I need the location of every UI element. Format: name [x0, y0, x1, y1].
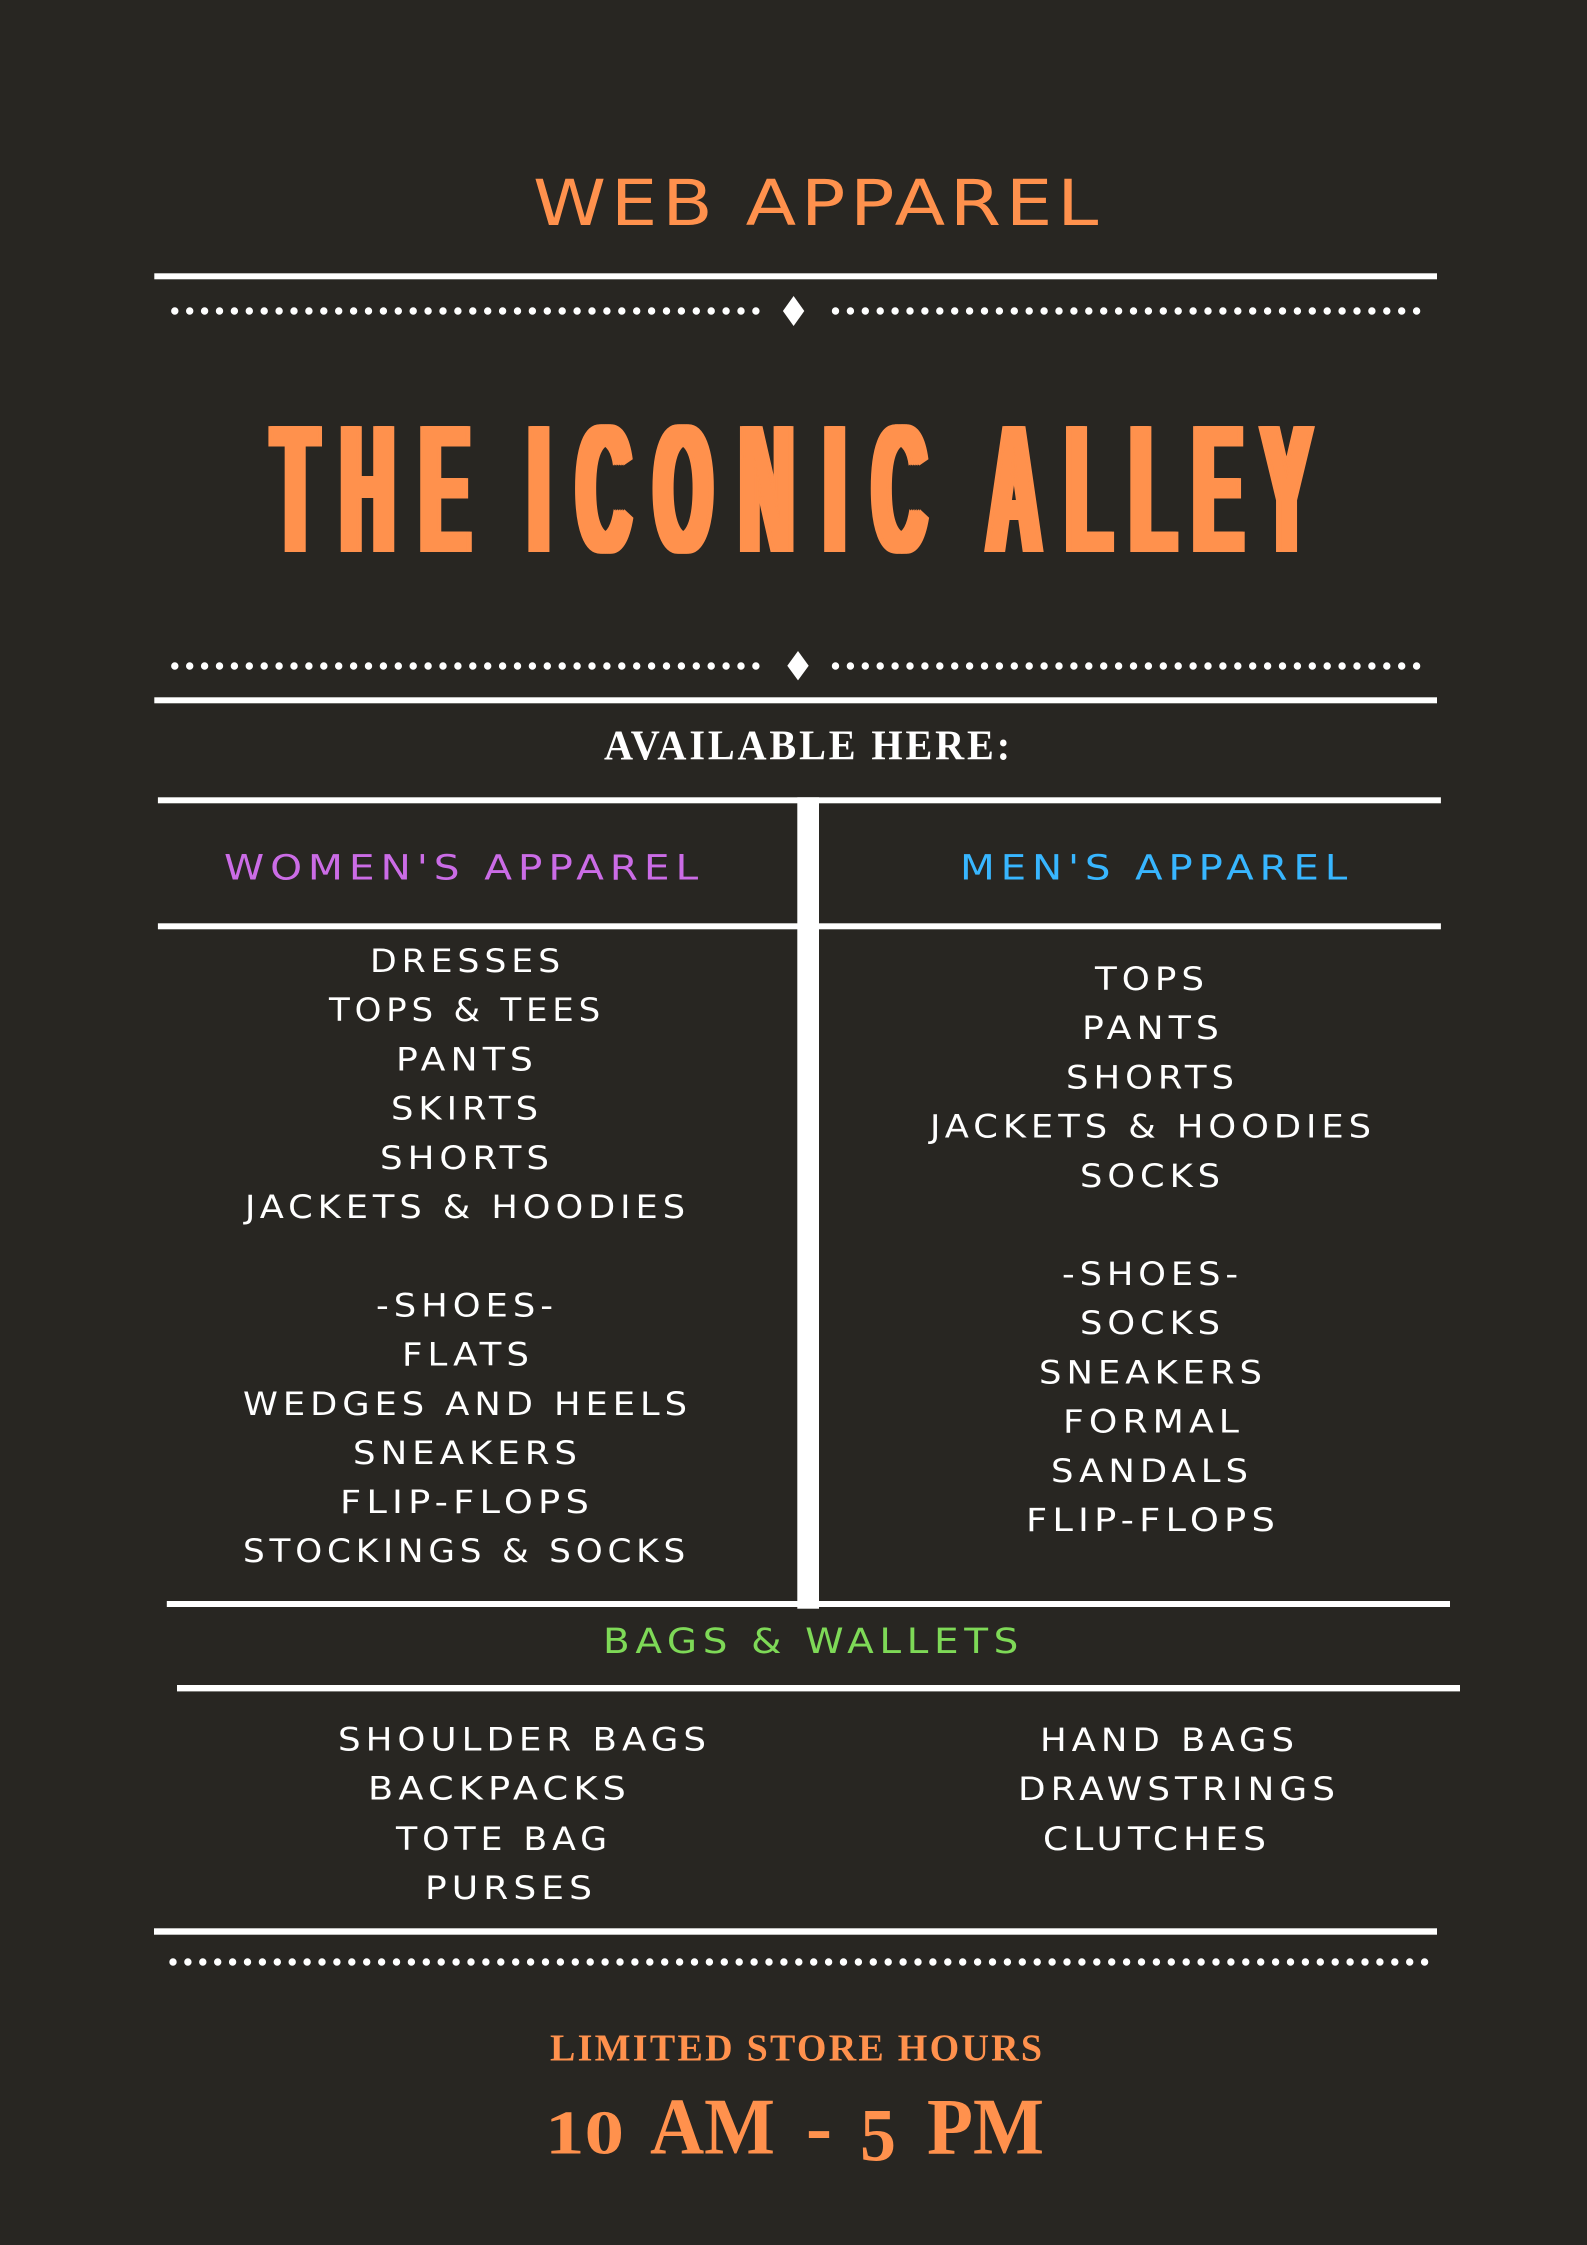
opening hours: AM: [650, 2083, 775, 2171]
men's clothing and shoes list: JACKETS & HOODIES: [928, 1108, 1376, 1146]
heading: women's apparel: WOMEN'S APPAREL: [224, 848, 704, 888]
bags list, left column: PURSES: [425, 1869, 597, 1907]
lower ornamental divider: [154, 651, 1437, 703]
men's clothing and shoes list: PANTS: [1082, 1009, 1224, 1047]
bags list, left column: SHOULDER BAGS: [338, 1721, 711, 1759]
bottom divider: [154, 1928, 1437, 1962]
opening hours: 5: [860, 2094, 896, 2178]
heading: bags and wallets: BAGS & WALLETS: [603, 1622, 1024, 1662]
women's clothing and shoes list: STOCKINGS & SOCKS: [243, 1532, 690, 1570]
bags list, left column: [338, 1721, 711, 1907]
women's clothing and shoes list: SHORTS: [380, 1139, 554, 1177]
main title: THE ICONIC ALLEY: [273, 387, 1311, 591]
top ornamental divider: [154, 273, 1437, 326]
women's clothing and shoes list: [243, 942, 692, 1570]
men's clothing and shoes list: SNEAKERS: [1039, 1353, 1267, 1391]
men's clothing and shoes list: -SHOES-: [1062, 1255, 1243, 1293]
men's clothing and shoes list: FLIP-FLOPS: [1026, 1501, 1280, 1539]
store name: Web Apparel: WEB APPAREL: [533, 167, 1103, 240]
men's clothing and shoes list: [928, 960, 1376, 1539]
men's clothing and shoes list: FORMAL: [1063, 1403, 1244, 1441]
women's clothing and shoes list: SKIRTS: [391, 1090, 543, 1128]
men's clothing and shoes list: SOCKS: [1080, 1304, 1225, 1342]
opening hours: PM: [927, 2083, 1044, 2171]
men's clothing and shoes list: SOCKS: [1080, 1157, 1225, 1195]
women's clothing and shoes list: PANTS: [396, 1040, 538, 1078]
opening hours: [545, 2083, 1044, 2178]
bags list, right column: DRAWSTRINGS: [1018, 1770, 1340, 1808]
panel: women's apparel: [224, 848, 704, 1570]
bags list, left column: BACKPACKS: [368, 1770, 631, 1808]
bags list, right column: [1018, 1721, 1340, 1858]
women's clothing and shoes list: TOPS & TEES: [328, 991, 605, 1029]
table frame lines: [158, 797, 1460, 1691]
panel: bags and wallets: [338, 1622, 1340, 1907]
limited store hours label: LIMITED STORE HOURS: [550, 2028, 1042, 2070]
women's clothing and shoes list: DRESSES: [370, 942, 565, 980]
men's clothing and shoes list: SANDALS: [1051, 1452, 1253, 1490]
men's clothing and shoes list: TOPS: [1094, 960, 1209, 998]
opening hours: 10: [545, 2099, 624, 2167]
bags list, right column: CLUTCHES: [1043, 1820, 1271, 1858]
women's clothing and shoes list: FLIP-FLOPS: [340, 1483, 594, 1521]
men's clothing and shoes list: SHORTS: [1066, 1058, 1239, 1096]
panel: men's apparel: [928, 848, 1376, 1539]
women's clothing and shoes list: FLATS: [402, 1336, 534, 1374]
women's clothing and shoes list: WEDGES AND HEELS: [243, 1385, 692, 1423]
women's clothing and shoes list: -SHOES-: [376, 1286, 558, 1324]
bags list, left column: TOTE BAG: [395, 1820, 612, 1858]
opening hours: -: [806, 2083, 832, 2171]
heading: men's apparel: MEN'S APPAREL: [960, 848, 1353, 888]
bags list, right column: HAND BAGS: [1040, 1721, 1299, 1759]
heading: available here: AVAILABLE HERE:: [604, 723, 1013, 769]
women's clothing and shoes list: SNEAKERS: [353, 1434, 582, 1472]
women's clothing and shoes list: JACKETS & HOODIES: [243, 1188, 690, 1226]
